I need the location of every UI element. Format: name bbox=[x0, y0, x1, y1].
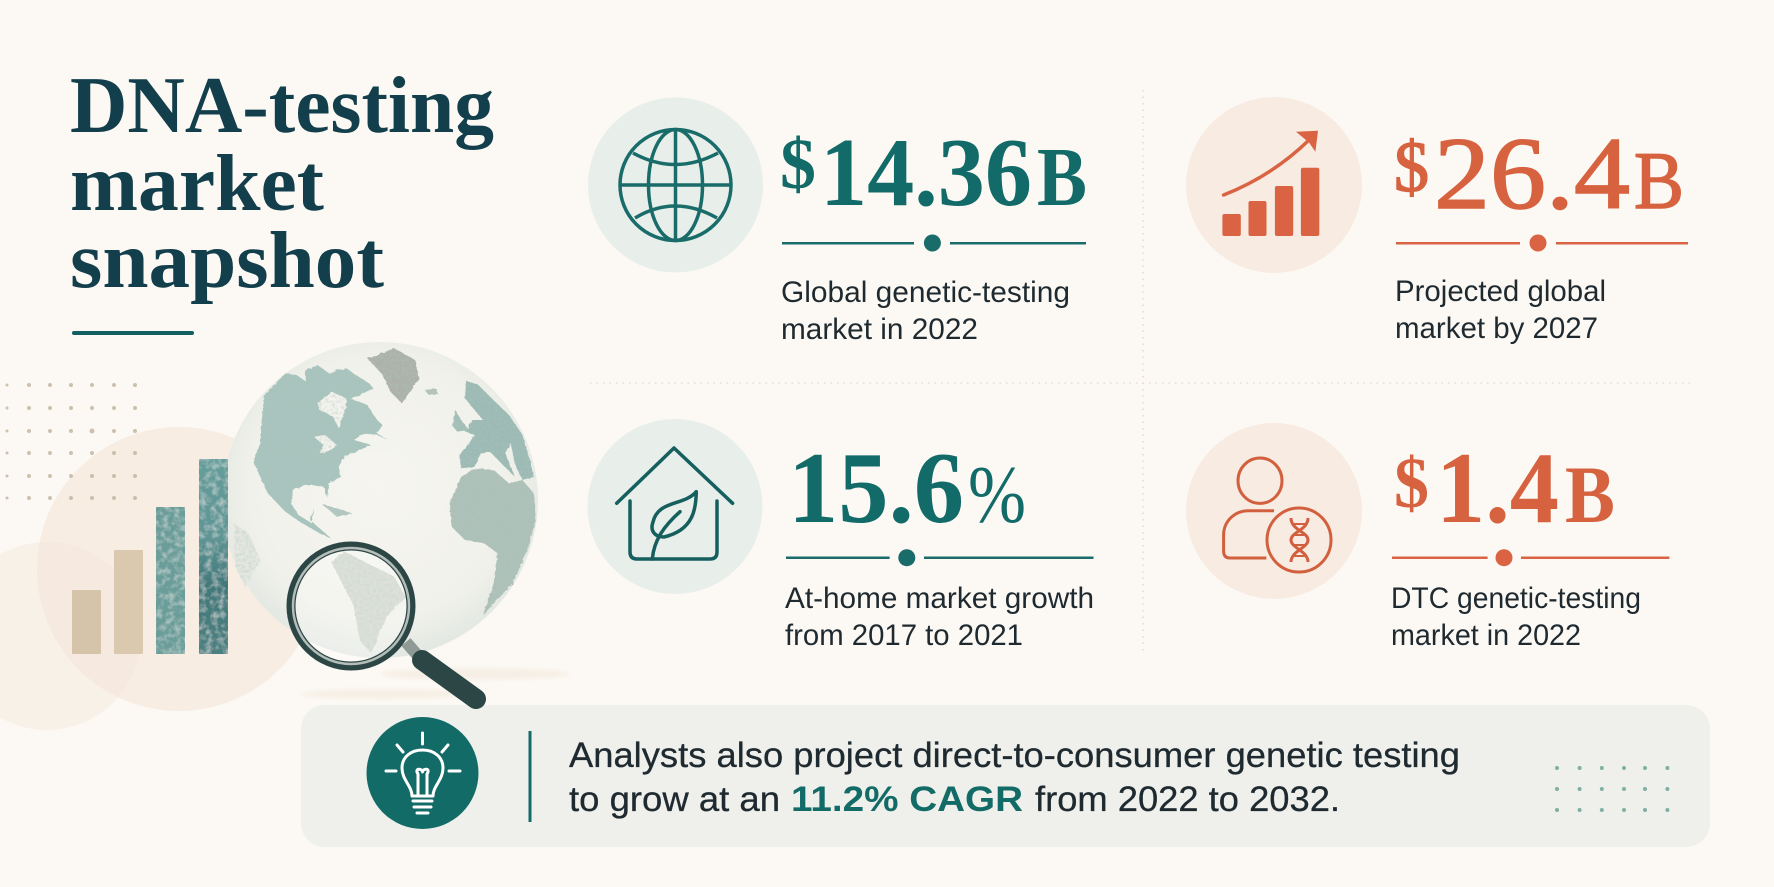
South America bbox=[331, 552, 406, 653]
Cuba bbox=[321, 504, 352, 517]
card: at-home growth bbox=[588, 419, 1102, 652]
callout text: 11.2% CAGR bbox=[791, 779, 1023, 819]
callout text: from 2022 to 2032. bbox=[1035, 779, 1340, 819]
illustration: globe, bars and magnifier bbox=[0, 342, 570, 730]
callout divider bbox=[528, 731, 532, 822]
card: global market 2022 bbox=[588, 98, 1087, 346]
dot pattern bbox=[6, 383, 137, 500]
description: At-home market growth bbox=[785, 582, 1094, 615]
icon: person with DNA bbox=[1186, 423, 1362, 599]
bar chart bbox=[72, 459, 228, 654]
description: market in 2022 bbox=[781, 313, 978, 346]
value: 1.4 bbox=[1436, 432, 1559, 545]
description: market by 2027 bbox=[1395, 312, 1598, 345]
Great Lakes bbox=[314, 435, 337, 453]
value: $ bbox=[1394, 127, 1429, 207]
rule with dot bbox=[786, 549, 1094, 566]
dotted grid dividers bbox=[590, 90, 1690, 655]
callout text: Analysts also project direct-to-consumer genetic testing bbox=[569, 735, 1460, 775]
title: market bbox=[70, 138, 324, 228]
Iceland bbox=[425, 388, 438, 395]
description: DTC genetic-testing bbox=[1391, 582, 1641, 615]
Africa bbox=[450, 468, 536, 615]
value: B bbox=[1037, 131, 1087, 224]
rule with dot bbox=[1392, 549, 1669, 566]
Hudson Bay bbox=[318, 392, 346, 428]
panel: analyst callout bbox=[301, 705, 1710, 847]
rule with dot bbox=[1396, 234, 1688, 252]
card: DTC market bbox=[1186, 423, 1669, 652]
value: B bbox=[1634, 135, 1684, 226]
value: $ bbox=[780, 124, 816, 204]
icon: growth chart bbox=[1186, 97, 1362, 273]
Pacific faint land bbox=[233, 523, 260, 587]
North America bbox=[253, 365, 387, 538]
title underline bbox=[72, 331, 194, 335]
ground shadow bbox=[300, 668, 570, 699]
value: 26.4 bbox=[1434, 117, 1630, 231]
description: Projected global bbox=[1395, 275, 1606, 308]
magnifying glass bbox=[291, 546, 476, 699]
value: B bbox=[1565, 449, 1615, 540]
British Isles bbox=[452, 410, 469, 432]
continents bbox=[233, 348, 536, 653]
title: DNA-testing bbox=[70, 60, 494, 150]
Europe bbox=[459, 381, 534, 480]
description: market in 2022 bbox=[1391, 619, 1581, 652]
icon: light bulb bbox=[366, 717, 478, 829]
value: $ bbox=[1394, 443, 1429, 523]
card: projected 2027 bbox=[1186, 97, 1688, 345]
value: 15.6 bbox=[788, 432, 964, 545]
title: snapshot bbox=[70, 215, 384, 305]
value: % bbox=[968, 449, 1026, 540]
description: from 2017 to 2021 bbox=[785, 619, 1023, 652]
background peach circles bbox=[0, 427, 321, 730]
icon: globe bbox=[588, 98, 763, 272]
icon: house with leaf bbox=[588, 419, 762, 594]
description: Global genetic-testing bbox=[781, 276, 1070, 309]
value: 14.36 bbox=[820, 119, 1032, 227]
Greenland bbox=[367, 348, 419, 403]
globe bbox=[222, 342, 538, 658]
rule with dot bbox=[782, 234, 1086, 252]
callout text: to grow at an bbox=[569, 779, 780, 819]
decorative dots bbox=[1555, 766, 1669, 812]
